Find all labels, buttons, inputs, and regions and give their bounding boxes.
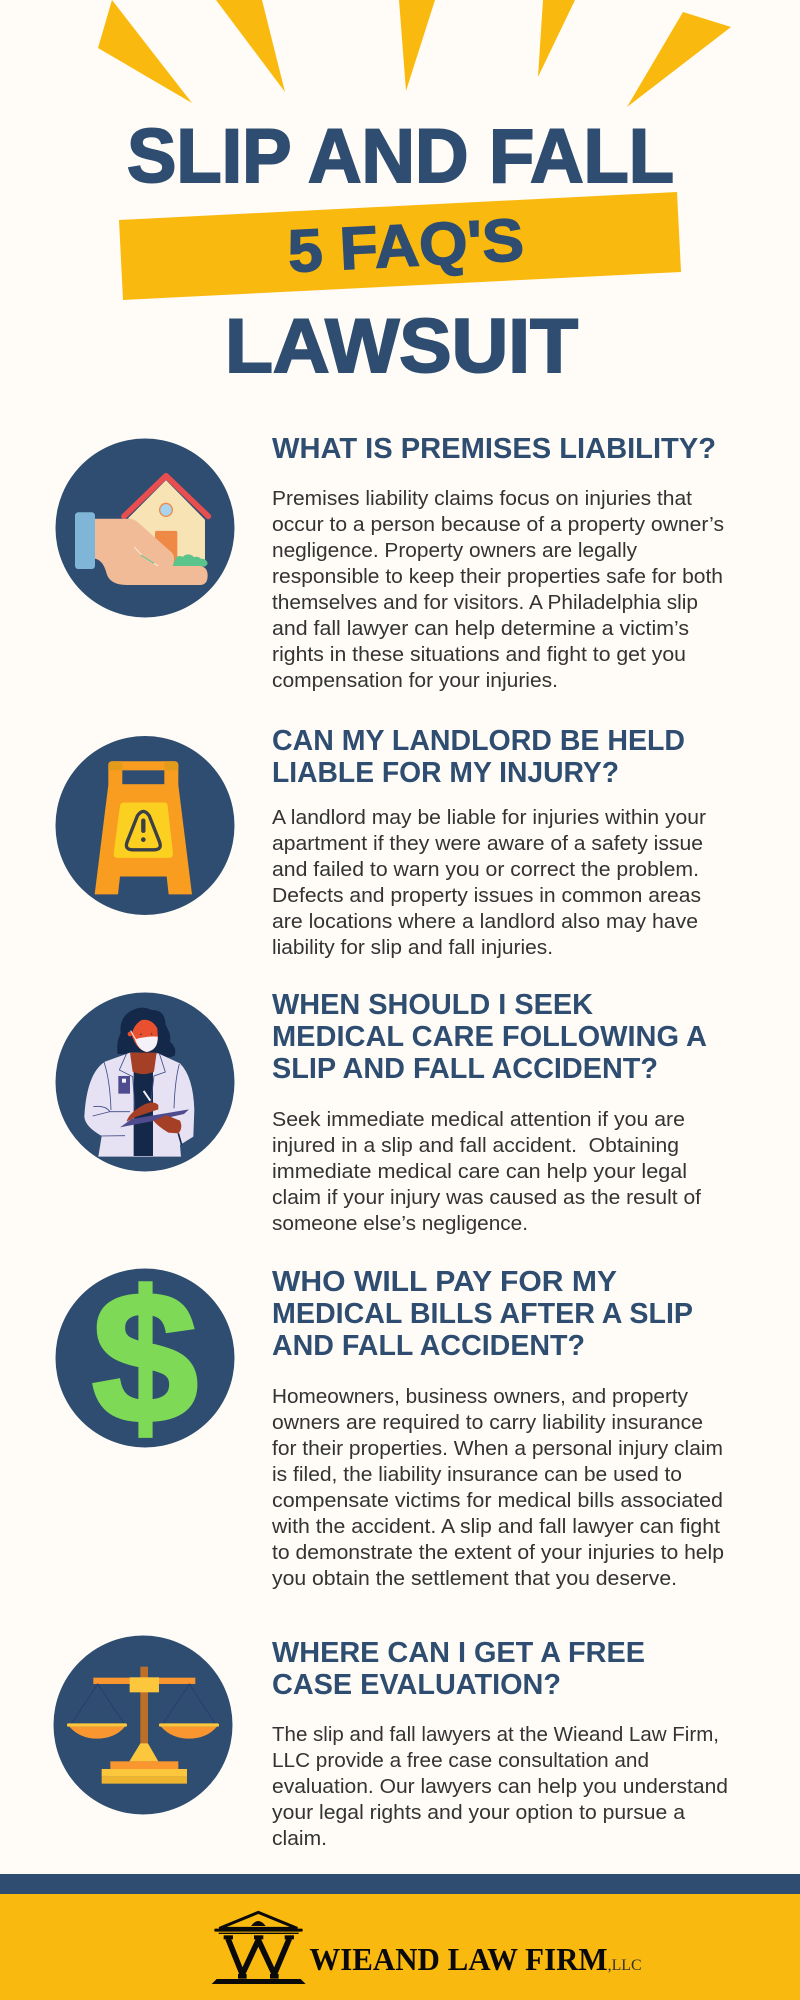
title: slip and fall: SLIP AND FALL bbox=[127, 114, 674, 199]
body text: and failed to warn you or correct the problem. bbox=[272, 858, 699, 881]
body text: Premises liability claims focus on injuries that bbox=[272, 487, 692, 510]
body text: immediate medical care can help your legal bbox=[272, 1160, 687, 1183]
body text: owners are required to carry liability insurance bbox=[272, 1411, 703, 1434]
body text: Homeowners, business owners, and property bbox=[272, 1385, 689, 1408]
body text bbox=[272, 487, 724, 692]
footer bbox=[0, 1874, 800, 2000]
body text bbox=[272, 806, 706, 959]
title: lawsuit: LAWSUIT bbox=[225, 304, 578, 389]
body text: A landlord may be liable for injuries within your bbox=[272, 806, 706, 829]
body text: apartment if they were aware of a safety issue bbox=[272, 832, 703, 855]
heading: MEDICAL CARE FOLLOWING A bbox=[272, 1021, 707, 1053]
banner: 5 FAQ's: 5 FAQ'S bbox=[286, 206, 525, 285]
body text: are locations where a landlord also may have bbox=[272, 910, 698, 933]
logo: Wieand Law Firm: WIEAND LAW FIRM bbox=[309, 1942, 608, 1977]
body text bbox=[272, 1108, 701, 1235]
body text: evaluation. Our lawyers can help you understand bbox=[272, 1775, 728, 1798]
body text: Seek immediate medical attention if you are bbox=[272, 1108, 685, 1131]
panel: when to seek medical care bbox=[56, 989, 707, 1235]
body text: Defects and property issues in common areas bbox=[272, 884, 701, 907]
panel: who pays medical bills bbox=[56, 1254, 724, 1590]
panel: free case evaluation bbox=[54, 1636, 728, 1850]
body text: to demonstrate the extent of your injuries to help bbox=[272, 1541, 724, 1564]
logo: Wieand Law Firm bbox=[212, 1912, 642, 1984]
heading: AND FALL ACCIDENT? bbox=[272, 1330, 585, 1362]
heading: MEDICAL BILLS AFTER A SLIP bbox=[272, 1298, 693, 1330]
icon: scales of justice bbox=[54, 1636, 232, 1814]
heading bbox=[272, 725, 685, 789]
heading: WHAT IS PREMISES LIABILITY? bbox=[272, 433, 716, 465]
body text: liability for slip and fall injuries. bbox=[272, 936, 553, 959]
icon: dollar sign bbox=[56, 1254, 234, 1463]
body text bbox=[272, 1723, 728, 1850]
heading bbox=[272, 1266, 693, 1362]
body text: claim if your injury was caused as the result of bbox=[272, 1186, 701, 1209]
body text: themselves and for visitors. A Philadelphia slip bbox=[272, 591, 698, 614]
heading: WHEN SHOULD I SEEK bbox=[272, 989, 593, 1021]
body text: your legal rights and your option to pursue a bbox=[272, 1801, 686, 1824]
heading: SLIP AND FALL ACCIDENT? bbox=[272, 1053, 658, 1085]
logo: Wieand Law Firm: ,LLC bbox=[608, 1957, 642, 1974]
body text: compensation for your injuries. bbox=[272, 669, 558, 692]
body text: and fall lawyer can help determine a victim’s bbox=[272, 617, 689, 640]
body text: you obtain the settlement that you deserve. bbox=[272, 1567, 677, 1590]
body text: compensate victims for medical bills associated bbox=[272, 1489, 723, 1512]
icon: doctor with clipboard bbox=[56, 992, 234, 1172]
body text: injured in a slip and fall accident. Obtaining bbox=[272, 1134, 679, 1157]
banner: 5 FAQ's bbox=[119, 192, 681, 300]
body text: responsible to keep their properties safe for both bbox=[272, 565, 723, 588]
body text: rights in these situations and fight to get you bbox=[272, 643, 686, 666]
body text: someone else’s negligence. bbox=[272, 1212, 528, 1235]
body text: negligence. Property owners are legally bbox=[272, 539, 638, 562]
body text: LLC provide a free case consultation and bbox=[272, 1749, 649, 1772]
heading: WHO WILL PAY FOR MY bbox=[272, 1266, 617, 1298]
panel: what is premises liability bbox=[56, 433, 724, 692]
body text: The slip and fall lawyers at the Wieand Law Firm, bbox=[272, 1723, 719, 1746]
heading: CAN MY LANDLORD BE HELD bbox=[272, 725, 685, 757]
heading: CASE EVALUATION? bbox=[272, 1669, 561, 1701]
heading: LIABLE FOR MY INJURY? bbox=[272, 757, 619, 789]
decorative sunburst rays bbox=[98, 0, 731, 107]
body text: with the accident. A slip and fall lawyer can fight bbox=[271, 1515, 720, 1538]
icon: dollar sign: $ bbox=[92, 1254, 198, 1463]
body text: for their properties. When a personal injury claim bbox=[272, 1437, 723, 1460]
body text: is filed, the liability insurance can be used to bbox=[272, 1463, 682, 1486]
heading: WHERE CAN I GET A FREE bbox=[272, 1637, 645, 1669]
body text: occur to a person because of a property owner’s bbox=[272, 513, 724, 536]
icon: hand holding house bbox=[56, 438, 234, 618]
body text: claim. bbox=[272, 1827, 327, 1850]
heading bbox=[272, 989, 707, 1085]
body text bbox=[271, 1385, 724, 1590]
panel: landlord liability bbox=[56, 725, 706, 959]
heading bbox=[272, 1637, 645, 1701]
icon: wet floor caution sign bbox=[56, 736, 234, 915]
